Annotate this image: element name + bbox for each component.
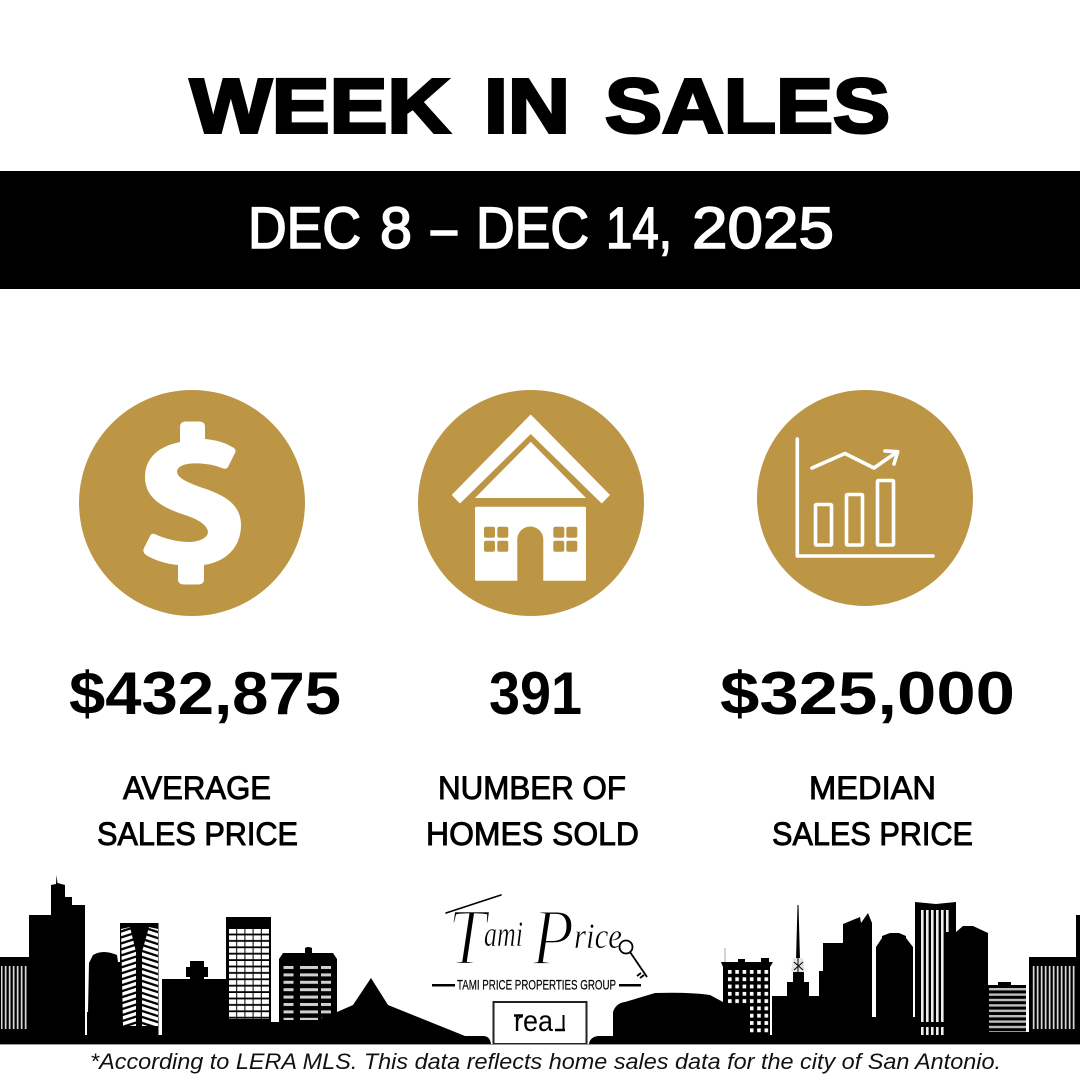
logo: real brokerage box [494, 1002, 586, 1044]
value: $325,000 [720, 660, 1015, 727]
logo: Tami Price signature: rice [574, 916, 622, 956]
label [97, 770, 298, 852]
logo: real brokerage box: rea [514, 1005, 553, 1038]
label: SALES PRICE [772, 816, 973, 852]
icon: bar chart [757, 390, 973, 606]
date range text: 2025 [692, 196, 834, 261]
logo: Tami Price signature: P [531, 894, 574, 982]
label [772, 770, 973, 852]
skyline: right [589, 902, 1080, 1044]
date range text: DEC [476, 196, 589, 261]
logo: Tami Price signature [446, 894, 622, 982]
logo: Tami Price signature: T [448, 894, 491, 982]
stat: median sales price [720, 390, 1015, 852]
label: NUMBER OF [438, 770, 626, 806]
title: SALES [605, 64, 890, 150]
logo: group name: TAMI PRICE PROPERTIES GROUP [457, 976, 616, 992]
date range text: DEC [248, 196, 361, 261]
stat: number of homes sold [418, 390, 644, 852]
logo: Tami Price signature: ami [484, 914, 523, 954]
footnote: *According to LERA MLS. This data reflects home sales data for the city of San Antonio. [90, 1049, 1001, 1074]
value: $432,875 [69, 660, 341, 727]
title: WEEK [190, 64, 450, 150]
label: MEDIAN [809, 770, 936, 806]
skyline: left [0, 875, 491, 1044]
title: IN [484, 64, 570, 150]
label: HOMES SOLD [426, 816, 639, 852]
label: SALES PRICE [97, 816, 298, 852]
title [190, 64, 890, 150]
icon: key [620, 940, 647, 978]
date range text: 14, [606, 196, 672, 261]
date range text: 8 [380, 196, 412, 261]
icon: house [418, 390, 644, 616]
label [426, 770, 639, 852]
stat: average sales price [69, 390, 341, 852]
icon: dollar sign [79, 390, 305, 616]
date banner [0, 171, 1080, 289]
date range text: – [431, 196, 458, 261]
value: 391 [489, 660, 582, 727]
logo: real brokerage box: l [561, 1011, 566, 1036]
label: AVERAGE [123, 770, 271, 806]
